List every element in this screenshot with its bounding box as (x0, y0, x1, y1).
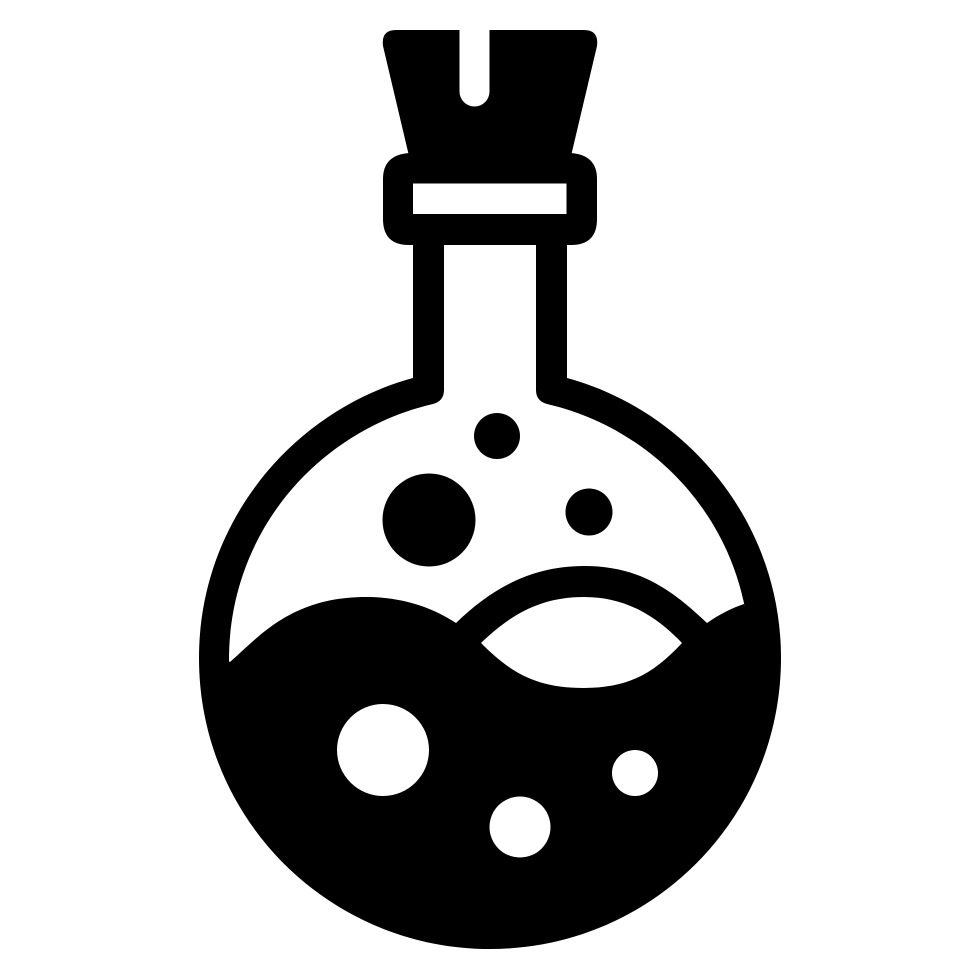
icon: bubbles above liquid (382, 413, 612, 566)
icon: cork stopper with notch (383, 30, 597, 156)
icon: flask collar (383, 153, 597, 245)
icon: bubbles inside liquid (337, 704, 658, 858)
icon: liquid with wave (227, 566, 752, 920)
icon: flask body outline (199, 240, 781, 949)
